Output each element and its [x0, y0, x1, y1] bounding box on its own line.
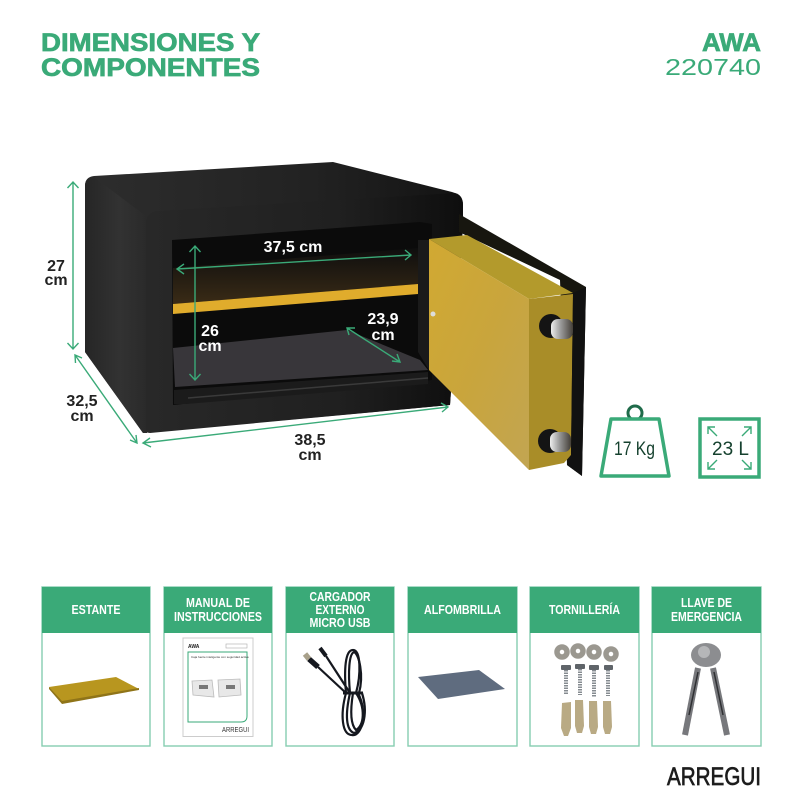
safe interior [172, 222, 432, 405]
dimension: width 38,5 cm: 38,5 [294, 432, 326, 449]
title: COMPONENTES [41, 54, 260, 82]
title [41, 29, 260, 82]
dimension: interior width 37,5 cm [177, 239, 411, 274]
hardware image [557, 646, 616, 736]
safe with open door [85, 162, 586, 476]
manual image: AWA [188, 644, 200, 650]
keys image [685, 643, 727, 735]
icon: weight 17 Kg [601, 406, 669, 476]
dimension: interior height 26 cm [190, 246, 222, 380]
panel: tornilleria [530, 587, 639, 746]
dimension: height 27 cm [44, 182, 78, 349]
model name and code: 220740 [665, 54, 761, 80]
panel: alfombrilla [408, 587, 517, 746]
icon: volume 23 L [700, 419, 759, 477]
dimension: interior depth 23,9 cm [347, 311, 400, 362]
dimension: interior width 37,5 cm: 37,5 cm [264, 239, 322, 256]
shelf image [49, 677, 139, 704]
logo: ARREGUI [667, 763, 761, 791]
panel: manual de instrucciones: MANUAL DE [186, 596, 250, 610]
panel: llave de emergencia: LLAVE DE [681, 596, 732, 610]
panel: manual de instrucciones: INSTRUCCIONES [174, 610, 262, 624]
safe body [85, 162, 463, 433]
icon: weight 17 Kg: 17 Kg [614, 439, 655, 460]
dimension: width 38,5 cm [143, 403, 448, 464]
manual image [183, 638, 253, 736]
manual image: ARREGUI [222, 727, 249, 734]
panel: cargador externo micro usb: EXTERNO [316, 603, 365, 617]
panel: cargador externo micro usb: CARGADOR [310, 590, 370, 604]
panel: manual de instrucciones [164, 587, 272, 746]
model name and code: AWA [702, 29, 761, 57]
door bolt [538, 429, 571, 453]
interior mat [173, 330, 428, 387]
panel: cargador externo micro usb [286, 587, 394, 746]
dimension: interior depth 23,9 cm: cm [371, 327, 395, 344]
panel: tornilleria: TORNILLERÍA [549, 602, 620, 617]
icon: volume 23 L: 23 L [712, 439, 749, 460]
dimension: width 38,5 cm: cm [298, 447, 322, 464]
mat image [418, 670, 505, 699]
panel: alfombrilla: ALFOMBRILLA [424, 603, 501, 617]
panel: llave de emergencia [652, 587, 761, 746]
dimension: height 27 cm: cm [44, 272, 68, 289]
usb cable image [305, 648, 365, 735]
panel: llave de emergencia: EMERGENCIA [671, 610, 742, 624]
dimension: interior height 26 cm: cm [198, 338, 222, 355]
model name and code [665, 29, 761, 80]
dimension: height 27 cm: 27 [47, 258, 65, 275]
dimension: interior depth 23,9 cm: 23,9 [367, 311, 399, 328]
panel: cargador externo micro usb: MICRO USB [310, 616, 370, 630]
panel: estante: ESTANTE [72, 603, 120, 617]
dimension: depth 32,5 cm: 32,5 [66, 393, 98, 410]
panel: estante [42, 587, 150, 746]
open door [418, 214, 586, 476]
dimension: interior height 26 cm: 26 [201, 323, 219, 340]
manual image: Caja fuerte inteligente con seguridad activa [191, 655, 249, 659]
dimension: depth 32,5 cm: cm [70, 408, 94, 425]
interior shelf [173, 284, 418, 314]
title: DIMENSIONES Y [41, 29, 260, 57]
door bolt [539, 314, 573, 339]
dimension: depth 32,5 cm [66, 355, 137, 443]
